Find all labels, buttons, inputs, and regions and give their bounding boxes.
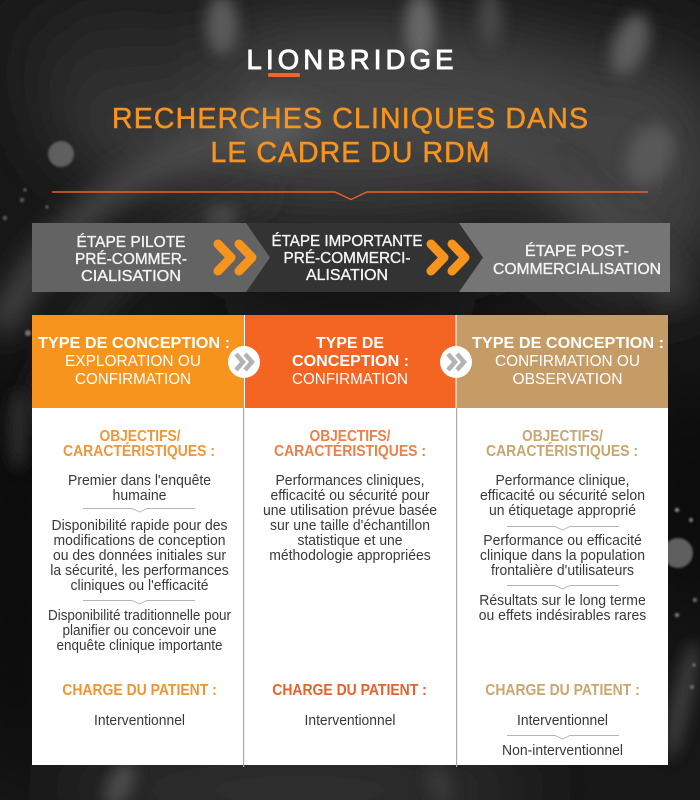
header: column 2: CONCEPTION : <box>292 353 409 370</box>
icon: double chevron 2 <box>431 244 465 271</box>
column 3 objectives text: Performance clinique, <box>496 473 630 489</box>
logo: Lionbridge: LIONBRIDGE <box>246 44 454 75</box>
column 3 objectives text: ou effets indésirables rares <box>479 608 646 624</box>
header: column 3 <box>456 315 668 408</box>
column 1 objectives heading: CARACTÉRISTIQUES : <box>63 443 215 460</box>
column 1 objectives heading <box>63 428 215 460</box>
header: column 2: CONFIRMATION <box>292 371 408 388</box>
column 1 objectives text <box>48 473 231 654</box>
column 1 objectives text: ou des données initiales sur <box>53 548 226 564</box>
header: column 1: EXPLORATION OU <box>65 353 201 370</box>
header: column 2 <box>245 315 456 408</box>
column 2 objectives text: une utilisation prévue basée <box>263 503 437 519</box>
stage 2 label <box>272 231 422 284</box>
stage 2 label: ÉTAPE IMPORTANTE <box>272 231 422 250</box>
header: column 3: TYPE DE CONCEPTION : <box>472 335 664 352</box>
logo underline bar <box>268 73 300 77</box>
column 2 objectives text: méthodologie appropriées <box>269 548 431 564</box>
header: column 3: OBSERVATION <box>512 371 622 388</box>
column 3 objectives text: clinique dans la population <box>480 548 645 564</box>
column 3 patient burden: Interventionnel <box>517 713 608 729</box>
column 2 objectives heading: OBJECTIFS/ <box>310 428 391 445</box>
column 3 objectives text: un étiquetage approprié <box>489 503 636 519</box>
column 3 objectives text <box>479 473 646 624</box>
column 1 patient burden: Interventionnel <box>94 713 185 729</box>
column 2 objectives text: efficacité ou sécurité pour <box>270 488 430 504</box>
column 2 objectives heading <box>274 428 426 460</box>
header: column 3: CONFIRMATION OU <box>495 353 640 370</box>
icon: double chevron 1 <box>218 244 252 271</box>
column 3 objectives heading: OBJECTIFS/ <box>522 428 604 445</box>
column 2 patient burden <box>272 682 427 729</box>
column 3 objectives text: efficacité ou sécurité selon <box>480 488 645 504</box>
column 2 objectives text: sur une taille d'échantillon <box>270 518 430 534</box>
stage 1 label: ÉTAPE PILOTE <box>76 232 186 251</box>
column 2 patient burden: CHARGE DU PATIENT : <box>272 682 427 699</box>
column 2 objectives text: Performances cliniques, <box>276 473 424 489</box>
icon: circle arrow 1 <box>228 346 260 378</box>
stage 1 label: CIALISATION <box>81 268 181 285</box>
column 2 patient burden: Interventionnel <box>304 713 396 729</box>
column 1 objectives text: enquête clinique importante <box>56 638 222 654</box>
title <box>112 103 588 169</box>
column 3 objectives text: Performance ou efficacité <box>483 533 642 549</box>
column 3 patient burden: Non-interventionnel <box>502 743 623 759</box>
column 1 objectives text: Premier dans l'enquête <box>68 473 211 489</box>
column 3 objectives text: Résultats sur le long terme <box>479 593 646 609</box>
stage 3 label: COMMERCIALISATION <box>493 261 661 278</box>
stage 2 shape <box>230 223 483 292</box>
column 1 objectives text: la sécurité, les performances <box>50 563 229 579</box>
stage 3 shape <box>440 223 670 292</box>
header: column 1 <box>32 315 244 408</box>
column 3 objectives heading <box>486 428 638 460</box>
column 1 objectives text: humaine <box>112 488 166 504</box>
stage 1 shape <box>32 223 270 292</box>
column 1 objectives text: modifications de conception <box>54 533 226 549</box>
stage 3 label <box>493 241 661 278</box>
stage 3 label: ÉTAPE POST- <box>525 241 629 260</box>
stage 2 label: PRÉ-COMMERCI- <box>284 248 410 267</box>
title: RECHERCHES CLINIQUES DANS <box>112 103 588 135</box>
stage 1 label: PRÉ-COMMER- <box>75 249 187 268</box>
header: column 1: CONFIRMATION <box>75 371 191 388</box>
stage 1 label <box>75 232 187 285</box>
title: LE CADRE DU RDM <box>210 137 490 169</box>
column 1 objectives heading: OBJECTIFS/ <box>100 428 181 445</box>
column 3 objectives text: frontalière d'utilisateurs <box>491 563 634 579</box>
stage arrow band <box>32 223 670 292</box>
column 1 objectives text: cliniques ou l'efficacité <box>70 578 208 594</box>
column 3 patient burden: CHARGE DU PATIENT : <box>485 682 640 699</box>
column 1 objectives text: planifier ou concevoir une <box>62 623 216 639</box>
column 2 objectives text <box>263 473 437 564</box>
stage 2 label: ALISATION <box>306 267 388 284</box>
column 2 objectives text: statistique et une <box>298 533 402 549</box>
column 1 objectives text: Disponibilité rapide pour des <box>52 518 228 534</box>
column 3 objectives heading: CARACTÉRISTIQUES : <box>486 443 638 460</box>
column 1 patient burden <box>62 682 217 729</box>
header: column 1: TYPE DE CONCEPTION : <box>38 335 230 352</box>
table panel <box>32 315 668 767</box>
column 1 objectives text: Disponibilité traditionnelle pour <box>48 608 231 624</box>
header: column 2: TYPE DE <box>316 335 384 352</box>
title divider with notch <box>52 192 648 200</box>
column 2 objectives heading: CARACTÉRISTIQUES : <box>274 443 426 460</box>
column 3 patient burden <box>485 682 640 759</box>
column 1 patient burden: CHARGE DU PATIENT : <box>62 682 217 699</box>
icon: circle arrow 2 <box>440 346 472 378</box>
